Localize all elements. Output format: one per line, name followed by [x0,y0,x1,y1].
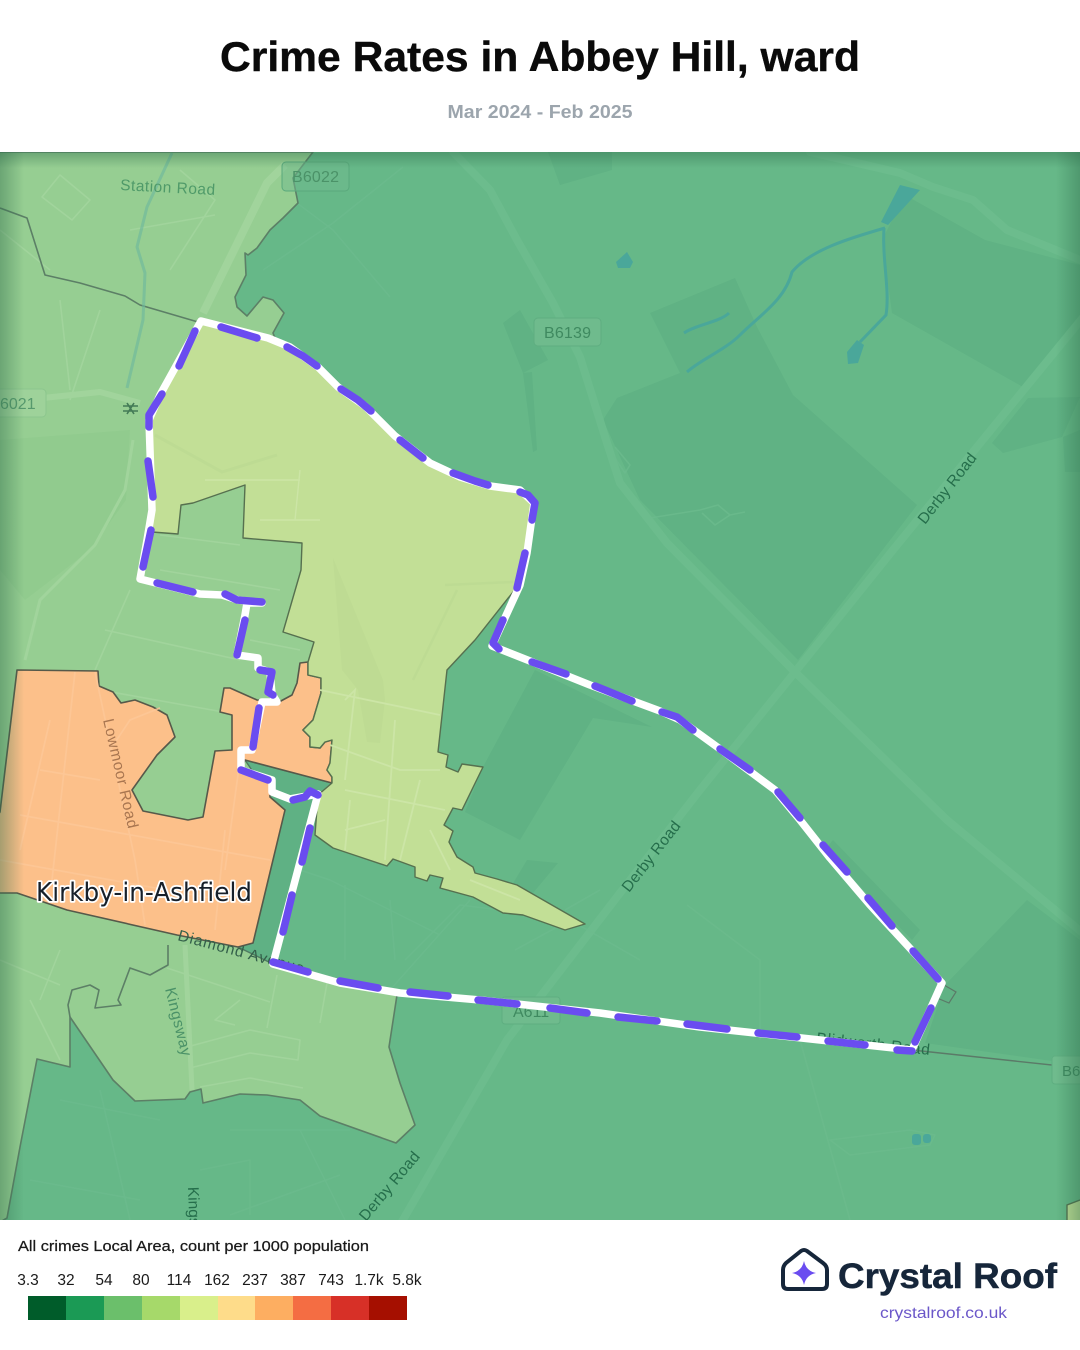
dark strip between orange area and ward [238,760,332,965]
icon: railway station [123,403,138,414]
streets in orange area [0,672,270,930]
stream near station [127,153,172,388]
legend values: 80 [132,1272,150,1289]
road line and label: Blidworth Road: B6 [1062,1063,1080,1080]
road sign: B6022 [282,162,349,191]
lime area details [205,470,520,900]
legend values: 54 [95,1272,113,1289]
area: medium-low crime, west and south [0,152,415,1225]
legend values: 114 [167,1272,192,1289]
road sign: B6021 [0,389,46,417]
road label: Station Road: Station Road [120,177,216,199]
website url: crystalroof.co.uk [880,1305,1008,1322]
title: Crime Rates in Abbey Hill, ward [220,33,860,80]
road line and label: Blidworth Road: Blidworth Road [816,1030,931,1059]
icon: house with star [783,1250,827,1289]
area: higher crime, orange [0,662,332,947]
road label: Lowmoor Road: Lowmoor Road [99,717,141,830]
legend title: All crimes Local Area, count per 1000 population [18,1238,369,1255]
legend values: 162 [204,1272,230,1289]
legend colour scale [28,1296,407,1320]
wordmark: Crystal Roof [838,1257,1057,1296]
water features [616,185,931,1145]
legend values: 3.3 [17,1272,39,1289]
road label: Derby Road centre: Derby Road [619,818,684,895]
road label: Kingsway south: Kingsway [184,1187,203,1254]
ward boundary: white outline [140,321,942,1050]
road sign: B6022: B6022 [292,169,339,186]
place label: Kirkby-in-Ashfield: Kirkby-in-Ashfield [36,878,252,908]
legend values: 237 [242,1272,268,1289]
area: lime, central ward [149,321,585,930]
legend values: 32 [57,1272,75,1289]
road label: Derby Road south: Derby Road [356,1149,424,1225]
area boundary lines, west [0,208,198,1017]
legend values [17,1272,422,1289]
road sign: A611 [502,997,560,1024]
legend values: 5.8k [392,1272,422,1289]
map base: low crime area [0,152,1080,1220]
road sign: B6139 [534,318,601,346]
legend values: 1.7k [354,1272,384,1289]
subtitle: Mar 2024 - Feb 2025 [448,101,632,122]
road label: Kingsway: Kingsway [161,986,195,1058]
road sign: A611: A611 [513,1004,549,1021]
road line and label: Blidworth Road [816,985,1080,1084]
corner area: lime [1066,1199,1080,1220]
darker field patches [465,152,1080,1065]
road label: Diamond Avenue: Diamond Avenue [176,927,306,978]
legend values: 743 [318,1272,344,1289]
road sign: B6021: 6021 [0,396,36,413]
ward boundary: purple dashes [143,327,938,1051]
roads in low crime area [603,322,1078,425]
map edge vignette [0,152,1080,1220]
legend [17,1238,422,1320]
road sign: B6139: B6139 [544,325,591,342]
logo: Crystal Roof [783,1250,1057,1322]
woodland and roads in west area [0,165,327,1090]
road label: Derby Road north east: Derby Road [915,450,980,527]
legend values: 387 [280,1272,306,1289]
